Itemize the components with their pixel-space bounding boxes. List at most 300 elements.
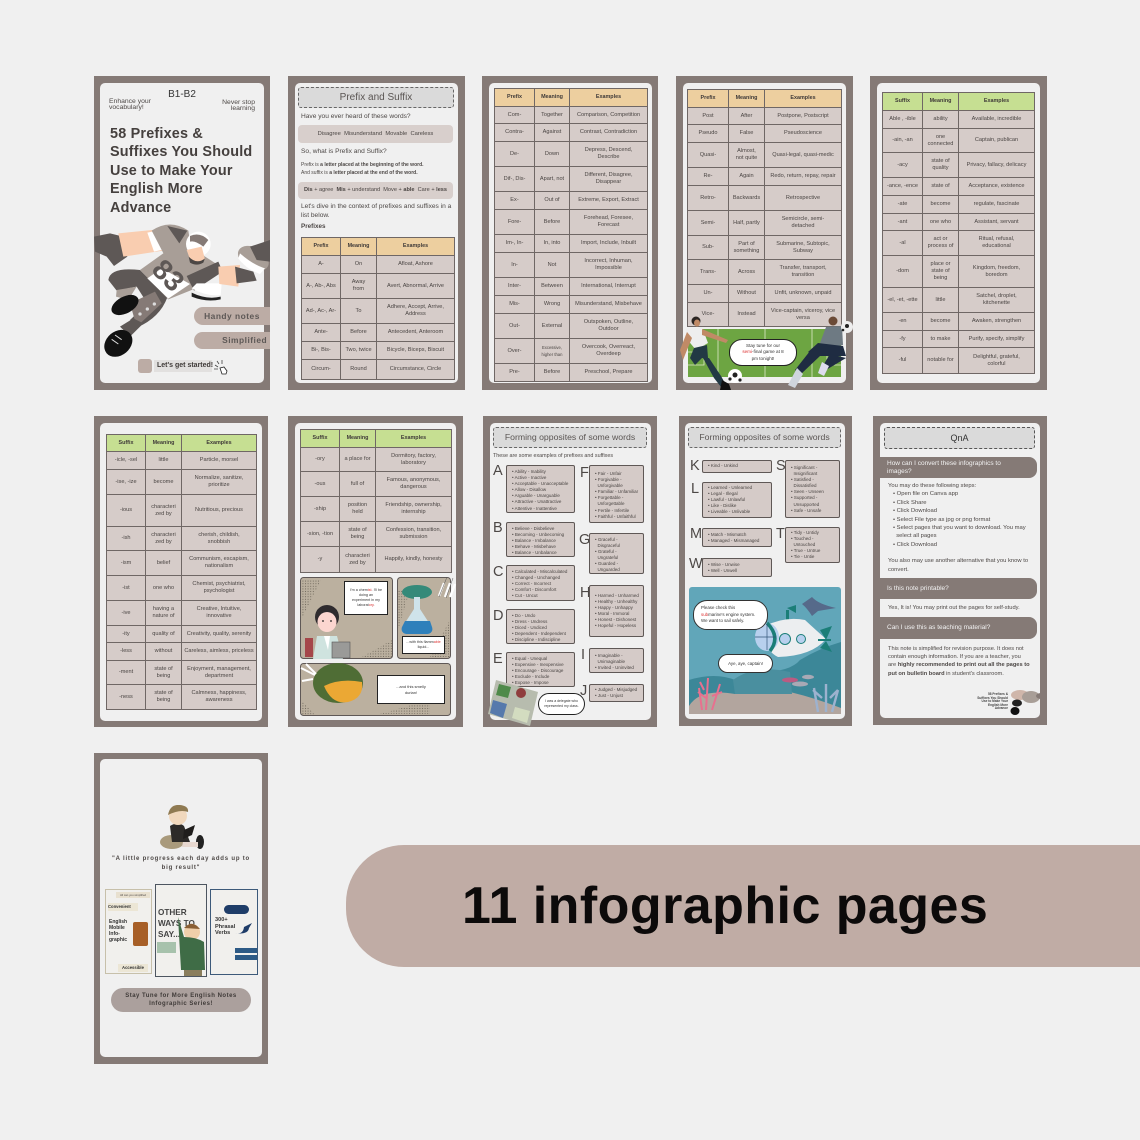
table: prefixes A to Circum: To: [356, 308, 361, 314]
table: prefixes Post to Vice: Unfit, unknown, unpaid: [775, 290, 831, 296]
page 8: forming opposites A to J: • Fertile - Infertile: [595, 508, 629, 513]
page 9: forming opposites K to W: Insignificant: [794, 471, 817, 476]
section A: A: [493, 463, 503, 479]
section E: E: [493, 651, 503, 667]
table: prefixes Com to Pre: Outspoken, Outline,: [584, 319, 633, 325]
answer 1: select all pages: [896, 533, 937, 539]
table: suffixes -able to -ful: Awaken, strengthen: [972, 318, 1021, 324]
level label: B1-B2: [168, 89, 196, 100]
table: prefixes A to Circum: Bi-, Bis-: [311, 347, 331, 353]
illustration: boy reading: [160, 805, 204, 849]
page 9: forming opposites K to W: • Safe - Unsafe: [791, 508, 821, 513]
table: prefixes Com to Pre: Depress, Descend,: [585, 147, 632, 153]
table: suffixes -able to -ful: Able , -ible: [889, 116, 916, 122]
table: suffixes -icle to -ness: -ment: [119, 669, 133, 675]
table: suffixes -ory to -y: laboratory: [401, 460, 426, 466]
table: suffixes -ory to -y: Meaning: [347, 435, 368, 441]
speech bubble: I was a delegate who: [545, 699, 578, 703]
definitions: [301, 162, 424, 176]
table: prefixes A to Circum: On: [355, 261, 362, 267]
page 9: forming opposites K to W: • Legal - Illegal: [708, 491, 738, 496]
illustration: football player: [94, 224, 270, 357]
table: suffixes -icle to -ness: prioritize: [208, 482, 230, 488]
table: suffixes -able to -ful: Examples: [984, 98, 1009, 104]
table: prefixes Com to Pre: Between: [541, 283, 563, 289]
page 9: forming opposites K to W: • Kind - Unkind: [708, 463, 738, 468]
answer 3: are highly recommended to print out all the pages to: [888, 662, 1030, 668]
page 8: forming opposites A to J: • Balance - Imbalance: [512, 538, 556, 543]
table: prefixes A to Circum: from: [353, 286, 364, 292]
table: suffixes -icle to -ness: snobbish: [208, 538, 230, 544]
table: suffixes -able to -ful: Kingdom, freedom,: [973, 264, 1020, 270]
table: suffixes -icle to -ness: nationalism: [205, 563, 233, 569]
table: prefixes Com to Pre: Contrast, Contradiction: [580, 129, 637, 135]
page 9: forming opposites K to W: • Seen - Unseen: [791, 489, 824, 494]
table: suffixes -able to -ful: become: [931, 201, 950, 207]
page 8: forming opposites A to J: • Comfort - Discomfort: [512, 587, 556, 592]
intro text: Let's dive in the context of prefixes and suffixes in a: [301, 203, 451, 210]
mini cover: mobile infographic: Convenient: [108, 904, 131, 909]
table: suffixes -icle to -ness: characteri: [151, 504, 176, 510]
table: prefixes Post to Vice: something: [734, 248, 759, 254]
table: prefixes Com to Pre: Preschool, Prepare: [585, 369, 632, 375]
table: prefixes Post to Vice: Re-: [703, 173, 712, 179]
table: suffixes -ory to -y: submission: [400, 534, 427, 540]
call to action button: [111, 988, 251, 1012]
table: prefixes Com to Pre: Disappear: [596, 179, 621, 185]
table: suffixes -able to -ful: quality: [932, 165, 949, 171]
table: prefixes A to Circum: Away: [352, 279, 365, 285]
page 9: forming opposites K to W: • Significant -: [791, 465, 817, 470]
page 11: closing page: [94, 753, 268, 1064]
table: prefixes Com to Pre: Incorrect, Inhuman,: [584, 258, 633, 264]
intro text: These are some examples of prefixes and suffixes: [493, 453, 613, 459]
title: 58 Prefixes &: [110, 126, 203, 142]
page 8: forming opposites A to J: • Expose - Impose: [512, 680, 549, 685]
table: suffixes -icle to -ness: one who: [153, 584, 174, 590]
table: prefixes Com to Pre: Inter-: [508, 283, 521, 289]
fish: [782, 675, 814, 686]
call to action: Let's get started!: [157, 362, 213, 369]
right tagline: Never stop: [222, 99, 255, 106]
page 8: forming opposites A to J: • Healthy - Unhealthy: [595, 599, 637, 604]
table: suffixes -able to -ful: process of: [928, 243, 953, 249]
table: suffixes -icle to -ness: Normalize, sanitize,: [195, 475, 243, 481]
table: prefixes Post to Vice: Pseudoscience: [784, 130, 822, 136]
section F: F: [580, 465, 589, 481]
page 7: suffixes ory to y with comic: [288, 416, 463, 727]
table: suffixes -ory to -y: Famous, anonymous,: [387, 477, 440, 483]
table: prefixes Com to Pre: In, into: [544, 240, 560, 246]
table: prefixes Post to Vice: Vice-captain, viceroy, vice: [771, 308, 835, 314]
section C: C: [493, 564, 503, 580]
table: prefixes A to Circum: Address: [405, 311, 426, 317]
section K: K: [690, 458, 700, 474]
table: suffixes -ory to -y: a place for: [344, 456, 371, 462]
answer 3: put on bulletin board in student's classroom.: [888, 671, 1004, 677]
page 3: prefixes Com to Pre: [482, 76, 658, 390]
speech bubble: reply: [718, 654, 773, 673]
table: suffixes -icle to -ness: Calmness, happiness,: [191, 690, 247, 696]
table: suffixes -able to -ful: -ful: [899, 357, 906, 363]
table: prefixes Com to Pre: Com-: [508, 112, 521, 118]
table: suffixes -icle to -ness: without: [155, 648, 172, 654]
table: prefixes Post to Vice: Quasi-legal, quasi-medic: [772, 152, 834, 158]
table: suffixes -icle to -ness: Chemist, psychiatrist,: [192, 581, 246, 587]
question bar 3: Can I use this as teaching material?: [887, 624, 990, 631]
table: suffixes -able to -ful: Acceptance, existence: [968, 183, 1024, 189]
table: prefixes Com to Pre: Outdoor: [598, 326, 619, 332]
mini cover: phrasal verbs: 300+: [215, 917, 228, 923]
table: suffixes -ory to -y: Suffix: [312, 435, 327, 441]
speech bubble: semi-final game at 8: [742, 349, 784, 354]
speech bubble: captain order: Please check this: [701, 605, 735, 610]
table: suffixes -able to -ful: Purify, specify, simplify: [969, 336, 1024, 342]
table: suffixes -able to -ful: Assistant, servant: [974, 218, 1019, 224]
table: suffixes -icle to -ness: become: [154, 478, 173, 484]
page 8: forming opposites A to J: • Invited - Uninvited: [595, 665, 634, 670]
page 8: forming opposites A to J: • Guarded -: [595, 561, 618, 566]
table: suffixes -icle to -ness: -ive: [121, 610, 130, 616]
table: prefixes Com to Pre: Down: [545, 150, 559, 156]
page 9: forming opposites K to W: • Liveable - Unlivable: [708, 509, 750, 514]
table: suffixes -able to -ful: boredom: [985, 272, 1008, 278]
page 8: forming opposites A to J: • Becoming - Unbecoming: [512, 532, 564, 537]
table: suffixes -icle to -ness: Creativity, quality, serenity: [187, 630, 251, 636]
table: prefixes A to Circum: Antecedent, Anteroom: [388, 329, 443, 335]
speech bubble: Stay tune for our: [746, 343, 780, 348]
table: suffixes -ory to -y: -ory: [315, 456, 325, 462]
table: suffixes -icle to -ness: -ness: [119, 694, 133, 700]
coral: blue: [813, 684, 838, 712]
table: suffixes -ory to -y: Friendship, ownership,: [385, 502, 442, 508]
answer 1: [888, 483, 1028, 573]
speech box: durian: ...and this smelly: [396, 684, 426, 689]
table: prefixes Com to Pre: [494, 88, 648, 382]
table: prefixes Com to Pre: De-: [510, 150, 519, 156]
table: prefixes Post to Vice: Vice-: [702, 311, 714, 317]
table: prefixes Com to Pre: higher than: [542, 352, 562, 357]
left tagline: [109, 98, 151, 111]
speech bubble: [729, 339, 797, 366]
page 8: forming opposites A to J: • Familiar - Unfamiliar: [595, 489, 638, 494]
table: suffixes -icle to -ness: quality of: [152, 630, 175, 636]
table: suffixes -icle to -ness: Enjoyment, management,: [187, 666, 251, 672]
speech bubble: captain order: We want to sail safely.: [701, 618, 744, 623]
right tagline: learning: [231, 105, 255, 112]
table: suffixes -icle to -ness: Meaning: [153, 440, 174, 446]
page 8: forming opposites A to J: • Harmed - Unharmed: [595, 593, 639, 598]
mini cover: other ways to say: SAY...: [158, 930, 180, 939]
table: prefixes Post to Vice: Un-: [703, 290, 712, 296]
table: suffixes -able to -ful: educational: [982, 243, 1011, 249]
table: prefixes Com to Pre: Im-, In-: [506, 240, 523, 246]
table: prefixes Post to Vice: Semi-: [701, 220, 715, 226]
speech bubble: chemist: laboratory.: [357, 603, 375, 607]
table: suffixes -icle to -ness: psychologist: [204, 588, 234, 594]
table: suffixes -able to -ful: -al: [899, 240, 906, 246]
table: suffixes -icle to -ness: state of: [154, 690, 173, 696]
table: prefixes Com to Pre: Against: [543, 129, 561, 135]
question bar 2: [880, 578, 1037, 599]
page 8: forming opposites A to J: • Calculated - Miscalculated: [512, 569, 567, 574]
speech bubble: chemist: doing an: [359, 593, 373, 597]
table: suffixes -able to -ful: connected: [928, 140, 953, 146]
table: suffixes -able to -ful: Delightful, grateful,: [973, 354, 1020, 360]
table: suffixes -able to -ful: Available, incredible: [972, 116, 1021, 122]
table: prefixes Post to Vice: Transfer, transport,: [779, 265, 827, 271]
answer 3: [888, 646, 1030, 677]
title: [110, 126, 252, 216]
mini player illustration: [1010, 690, 1040, 715]
table: prefixes Post to Vice: Almost,: [737, 148, 756, 154]
comic panel: flask: [397, 577, 456, 659]
table: suffixes -icle to -ness: -less: [120, 648, 132, 654]
page 9: forming opposites K to W: • Learned - Unlearned: [708, 485, 752, 490]
page 9: forming opposites K to W: • Lawful - Unlawful: [708, 497, 745, 502]
answer 1: • Click Share: [893, 500, 927, 506]
table: prefixes Post to Vice: Semicircle, semi-: [782, 216, 824, 222]
table: suffixes -able to -ful: Satchel, droplet,: [976, 293, 1017, 299]
right player: [788, 316, 846, 388]
table: prefixes Post to Vice: After: [741, 112, 752, 118]
table: prefixes Post to Vice: Quasi-: [700, 152, 716, 158]
page 8: forming opposites A to J: • Believe - Disbelieve: [512, 526, 554, 531]
table: prefixes A to Circum: [301, 237, 455, 380]
table: prefixes Com to Pre: Out-: [509, 322, 520, 328]
speech bubble: reply: Aye, aye, captain!: [728, 661, 763, 666]
page 9: forming opposites K to W: • Tie - Untie: [791, 554, 814, 559]
table: suffixes -able to -ful: -dom: [896, 268, 909, 274]
page 8: forming opposites A to J: Ungrateful: [598, 555, 618, 560]
table: prefixes Post to Vice: [687, 89, 842, 327]
table: suffixes -able to -ful: kitchenette: [983, 300, 1010, 306]
mini cover: phrasal verbs: Verbs: [215, 930, 230, 936]
heading: [298, 87, 454, 108]
label: Prefixes: [301, 223, 326, 230]
table: prefixes Com to Pre: Fore-: [508, 218, 521, 224]
table: prefixes A to Circum: A-, Ab-, Abs: [306, 282, 336, 288]
table: prefixes Post to Vice: Subway: [793, 248, 813, 254]
mini book title: 58 Prefixes &: [988, 692, 1008, 696]
example words pill: Disagree Misunderstand Movable Careless: [318, 131, 433, 137]
page 8: forming opposites A to J: Unforgivable: [598, 483, 623, 488]
table: prefixes Post to Vice: Again: [739, 173, 754, 179]
answer 3: This note is simplified for revision purpose. It does not: [888, 646, 1024, 652]
page 10: QnA: [873, 416, 1047, 725]
table: suffixes -icle to -ness: zed by: [155, 510, 172, 516]
table: prefixes Com to Pre: Wrong: [544, 301, 560, 307]
page 8: forming opposites A to J: • Changed - Unchanged: [512, 575, 560, 580]
table: prefixes Com to Pre: Out of: [544, 197, 560, 203]
table: prefixes Com to Pre: Ex-: [510, 197, 519, 203]
illustration: soccer field: [680, 316, 853, 390]
table: prefixes A to Circum: Circumstance, Circle: [390, 366, 441, 372]
table: suffixes -ory to -y: characteri: [345, 552, 370, 558]
page 8: forming opposites A to J: • Encourage - Discourage: [512, 668, 563, 673]
heading: QnA: [950, 433, 968, 443]
table: suffixes -icle to -ness: -ish: [121, 535, 130, 541]
table: prefixes Com to Pre: Overcook, Overreact,: [582, 344, 635, 350]
page 8: forming opposites A to J: • Behave - Misbehave: [512, 544, 556, 549]
table: suffixes -ory to -y: held: [352, 509, 363, 515]
speech bubble: pm tonight!: [752, 356, 774, 361]
page 8: forming opposites A to J: • Diced - Undiced: [512, 625, 547, 630]
table: suffixes -ory to -y: being: [351, 534, 364, 540]
speech bubble: [538, 693, 585, 715]
table: suffixes -able to -ful: Ritual, refusal,: [979, 236, 1014, 242]
page 6: suffixes icle to ness: [94, 416, 268, 727]
table: suffixes -icle to -ness: characteri: [151, 532, 176, 538]
left player: [680, 316, 731, 390]
table: suffixes -icle to -ness: Creative, Intuitive,: [197, 606, 241, 612]
table: prefixes A to Circum: Ad-, Ac-, Ar-: [306, 308, 336, 314]
title: Suffixes You Should: [110, 144, 252, 160]
table: prefixes Post to Vice: Postpone, Postscript: [777, 112, 829, 118]
table: prefixes Post to Vice: Submarine, Subtopic,: [776, 240, 830, 246]
table: suffixes -icle to -ness: -ist: [122, 584, 130, 590]
table: suffixes -able to -ful: little: [936, 296, 945, 302]
speech bubble: represented my class.: [544, 704, 579, 708]
pill: handy notes: [194, 307, 270, 325]
table: prefixes Com to Pre: Forecast: [598, 222, 619, 228]
page 9: forming opposites K to W: • Well - Unwell: [708, 568, 737, 573]
page 8: forming opposites A to J: • Correct - Incorrect: [512, 581, 551, 586]
call to action button: Infographic Series!: [149, 1001, 213, 1007]
table: prefixes A to Circum: Avert, Abnormal, Arrive: [387, 282, 444, 288]
call to action: [138, 359, 228, 374]
banner: page count: [346, 845, 1140, 967]
table: prefixes Post to Vice: versa: [796, 314, 810, 320]
section H: H: [580, 585, 590, 601]
table: prefixes A to Circum: Adhere, Accept, Arrive,: [387, 304, 444, 310]
mini cover: mobile infographic: Info-: [109, 931, 120, 937]
page 8: forming opposites A to J: Unguarded: [598, 567, 620, 572]
table: suffixes -ory to -y: [300, 429, 452, 573]
table: prefixes Post to Vice: Instead: [737, 311, 756, 317]
section T: T: [776, 526, 785, 542]
speech box: flask: [402, 636, 445, 654]
speech box: durian: [377, 675, 445, 704]
table: suffixes -icle to -ness: Communism, escapism,: [189, 556, 249, 562]
speech bubble: chemist: experiment in my: [352, 598, 380, 602]
call to action button: Stay Tune for More English Notes: [125, 992, 237, 998]
page 9: forming opposites K to W: Unsupported: [794, 502, 819, 507]
page 9: forming opposites K to W: Untouched: [794, 542, 815, 547]
table: suffixes -icle to -ness: -icle, -sel: [115, 457, 137, 463]
section L: L: [691, 481, 699, 497]
table: suffixes -icle to -ness: Examples: [206, 440, 232, 446]
table: prefixes Com to Pre: Mis-: [509, 301, 520, 307]
table: prefixes Post to Vice: Retrospective: [786, 194, 820, 200]
table: prefixes Com to Pre: Together: [541, 112, 563, 118]
pill: handy notes: Handy notes: [204, 311, 260, 321]
table: suffixes -able to -ful: [882, 92, 1035, 374]
answer 1: • Select File type as jpg or png format: [893, 517, 990, 523]
answer 2: Yes, It is! You may print out the pages for self-study.: [888, 605, 1020, 611]
comic panel: durian: [300, 663, 451, 716]
table: suffixes -able to -ful: regulate, fascinate: [974, 201, 1019, 207]
page 8: forming opposites A to J: • Grateful -: [595, 549, 617, 554]
table: suffixes -able to -ful: -en: [898, 318, 907, 324]
table: prefixes Com to Pre: Overdeep: [596, 351, 621, 357]
mini cover: mobile infographic: English: [109, 919, 127, 925]
table: prefixes A to Circum: Meaning: [348, 243, 369, 249]
table: suffixes -ory to -y: position: [348, 502, 367, 508]
heading: [493, 427, 647, 448]
mini cover: other ways to say: OTHER: [158, 908, 187, 917]
page 8: forming opposites A to J: • Do - Undo: [512, 613, 535, 618]
table: prefixes Com to Pre: Not: [548, 262, 556, 268]
table: suffixes -ory to -y: dangerous: [400, 484, 427, 490]
soccer ball: [728, 369, 742, 383]
mini cover: other ways to say: [155, 884, 207, 977]
table: suffixes -able to -ful: Captain, publican: [975, 137, 1018, 143]
title: English More: [110, 181, 203, 197]
section M: M: [690, 526, 702, 542]
table: suffixes -icle to -ness: little: [159, 457, 168, 463]
table: prefixes Post to Vice: Half, partly: [733, 220, 760, 226]
page 8: forming opposites A to J: • Cut - Uncut: [512, 593, 538, 598]
intro text: [301, 203, 452, 219]
table: suffixes -able to -ful: one who: [930, 218, 951, 224]
table: suffixes -icle to -ness: belief: [157, 560, 170, 566]
table: suffixes -icle to -ness: Suffix: [118, 440, 133, 446]
table: suffixes -able to -ful: one: [936, 134, 945, 140]
section W: W: [689, 556, 703, 572]
question bar 1: [880, 457, 1037, 478]
title: Use to Make Your: [110, 163, 233, 179]
heading: Forming opposites of some words: [699, 432, 830, 442]
page 8: forming opposites A to J: • Ability - Inability: [512, 469, 546, 474]
table: suffixes -icle to -ness: department: [205, 672, 233, 678]
table: prefixes Post to Vice: False: [740, 130, 753, 136]
table: suffixes -icle to -ness: awareness: [205, 697, 233, 703]
table: suffixes -able to -ful: Suffix: [895, 98, 910, 104]
table: suffixes -icle to -ness: zed by: [155, 538, 172, 544]
table: prefixes Post to Vice: Trans-: [700, 268, 716, 274]
table: prefixes Com to Pre: Over-: [508, 348, 521, 354]
mini cover: phrasal verbs: [210, 889, 258, 975]
quote: "A little progress each day adds up to: [112, 856, 250, 862]
table: suffixes -icle to -ness: -ism: [121, 560, 131, 566]
table: prefixes Com to Pre: Dif-, Dis-: [504, 176, 525, 182]
table: suffixes -able to -ful: ability: [933, 116, 948, 122]
speech bubble: captain order: [693, 600, 768, 630]
page 8: forming opposites A to J: • Happy - Unhappy: [595, 605, 633, 610]
quote: [112, 856, 250, 871]
quote: big result": [162, 865, 200, 871]
table: prefixes A to Circum: Bicycle, Biceps, Biscuit: [387, 347, 444, 353]
page 8: forming opposites A to J: Unimaginable: [598, 659, 625, 664]
table: suffixes -able to -ful: -fy: [899, 336, 906, 342]
table: suffixes -ory to -y: full of: [351, 480, 364, 486]
page 8: forming opposites A to J: • Acceptable - Unacceptable: [512, 481, 568, 486]
page 9: forming opposites K to W: • Satisfied -: [791, 477, 814, 482]
table: suffixes -able to -ful: colorful: [987, 360, 1006, 366]
table: prefixes Post to Vice: Backwards: [733, 194, 760, 200]
mini cover: mobile infographic: Accessible: [122, 965, 144, 970]
page 8: forming opposites A to J: • Attractive - Unattractive: [512, 499, 561, 504]
mini cover: other ways to say: WAYS TO: [158, 919, 195, 928]
mini book title: [977, 692, 1008, 710]
table: suffixes -icle to -ness: state of: [154, 666, 173, 672]
table: prefixes Com to Pre: Examples: [596, 94, 621, 100]
page 8: forming opposites A to J: • Judged - Misjudged: [595, 687, 637, 692]
table: suffixes -icle to -ness: cherish, childish,: [198, 532, 240, 538]
page 9: forming opposites K to W: • True - Untrue: [791, 548, 820, 553]
heading: Forming opposites of some words: [505, 432, 635, 442]
